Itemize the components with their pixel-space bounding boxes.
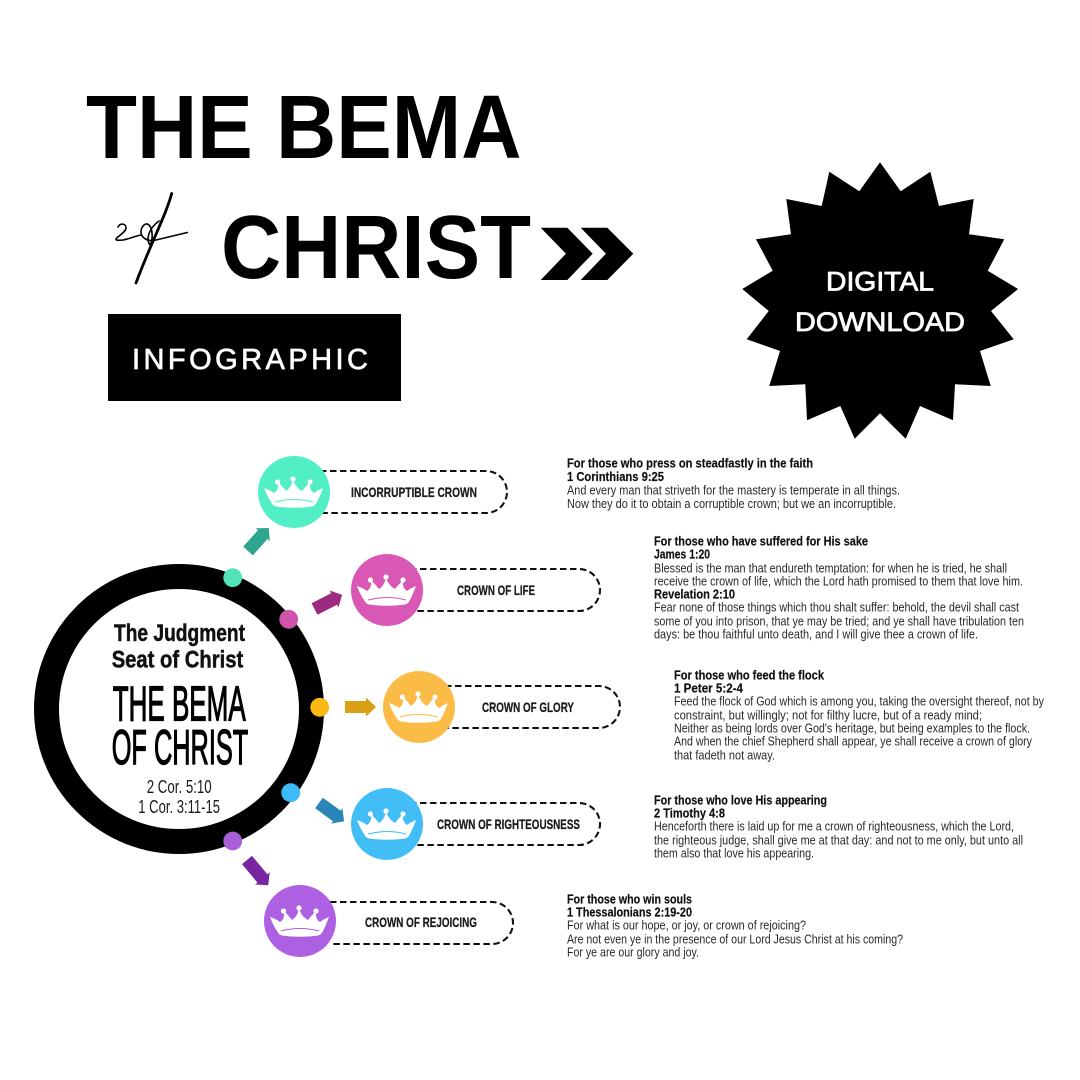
- crown row: crown of glory: [383, 671, 620, 743]
- crown row: incorruptible crown: [258, 456, 507, 528]
- arrow: purple: [240, 854, 275, 891]
- connector dots on ring: [223, 568, 329, 850]
- text block: crown of righteousness: Henceforth there is laid up for me a crown of righteousness, which the Lord,: [654, 818, 1014, 834]
- text block: crown of life: days: be thou faithful unto death, and I will give thee a crown of life.: [654, 626, 978, 642]
- crown row: incorruptible crown: INCORRUPTIBLE CROWN: [351, 484, 477, 500]
- text block: crown of life: Blessed is the man that endureth temptation: for when he is tried, he shall: [654, 560, 1007, 576]
- text block: incorruptible crown: [567, 456, 900, 511]
- ring title: the bema of christ: OF CHRIST: [112, 721, 248, 775]
- crown row: crown of righteousness: [351, 788, 600, 860]
- text block: crown of righteousness: For those who love His appearing: [654, 792, 827, 808]
- text block: crown of rejoicing: For what is our hope, or joy, or crown of rejoicing?: [567, 918, 806, 932]
- text block: crown of life: James 1:20: [654, 546, 710, 562]
- crown row: crown of rejoicing: CROWN OF REJOICING: [365, 914, 477, 930]
- text block: crown of glory: 1 Peter 5:2-4: [674, 680, 744, 696]
- title: Christ: CHRIST: [221, 198, 531, 298]
- badge: digital download: [742, 162, 1018, 439]
- ring title: the bema of christ: [112, 678, 248, 775]
- text block: crown of glory: constraint, but willingly; not for filthy lucre, but of a ready mind;: [674, 708, 982, 722]
- text block: crown of righteousness: [654, 792, 1023, 860]
- badge: digital download: DOWNLOAD: [795, 307, 965, 337]
- text block: crown of glory: that fadeth not away.: [674, 748, 775, 762]
- crown row: crown of life: CROWN OF LIFE: [457, 582, 535, 598]
- ring heading: the judgment seat of christ: Seat of Christ: [112, 646, 243, 674]
- signature-style word: of: [116, 194, 187, 283]
- ring heading: the judgment seat of christ: [112, 620, 245, 674]
- crown row: crown of righteousness: CROWN OF RIGHTEOUSNESS: [437, 816, 580, 832]
- arrow: blue: [313, 795, 350, 829]
- text block: crown of righteousness: them also that love his appearing.: [654, 846, 814, 860]
- ring references: 1 Cor. 3:11-15: [138, 797, 220, 817]
- text block: crown of life: Revelation 2:10: [654, 586, 735, 602]
- text block: crown of rejoicing: For ye are our glory and joy.: [567, 944, 699, 960]
- ring references: [138, 777, 220, 817]
- text block: crown of rejoicing: [567, 892, 903, 960]
- crown row: crown of glory: CROWN OF GLORY: [482, 699, 574, 715]
- text block: crown of glory: For those who feed the flock: [674, 668, 825, 682]
- arrow: gold: [345, 698, 376, 716]
- text block: incorruptible crown: For those who press on steadfastly in the faith: [567, 456, 813, 470]
- text block: crown of life: [654, 534, 1024, 642]
- crown row: crown of life: [351, 554, 600, 626]
- arrow: magenta: [310, 586, 346, 617]
- icon: double chevron arrows: [541, 228, 633, 280]
- badge: digital download: DIGITAL: [826, 266, 934, 296]
- text block: crown of life: For those who have suffered for His sake: [654, 534, 868, 548]
- text block: incorruptible crown: And every man that striveth for the mastery is temperate in all things.: [567, 482, 900, 498]
- panel: central ring: [46, 576, 312, 842]
- crown row: crown of rejoicing: [264, 885, 513, 957]
- label box: infographic: [108, 314, 401, 401]
- ring heading: the judgment seat of christ: The Judgment: [114, 620, 245, 647]
- title: The Bema: THE BEMA: [86, 78, 522, 178]
- text block: crown of glory: [674, 668, 1044, 762]
- text block: incorruptible crown: 1 Corinthians 9:25: [567, 469, 664, 484]
- text block: crown of rejoicing: Are not even ye in the presence of our Lord Jesus Christ at his coming?: [567, 932, 903, 946]
- ring references: 2 Cor. 5:10: [147, 777, 212, 797]
- arrow: teal: [241, 522, 276, 557]
- label box: infographic: INFOGRAPHIC: [132, 344, 368, 376]
- text block: crown of righteousness: 2 Timothy 4:8: [654, 806, 725, 820]
- text block: incorruptible crown: Now they do it to obtain a corruptible crown; but we an incorruptible.: [567, 496, 896, 511]
- text block: crown of rejoicing: For those who win souls: [567, 892, 692, 906]
- ring title: the bema of christ: THE BEMA: [113, 678, 246, 732]
- text block: crown of rejoicing: 1 Thessalonians 2:19-20: [567, 904, 692, 920]
